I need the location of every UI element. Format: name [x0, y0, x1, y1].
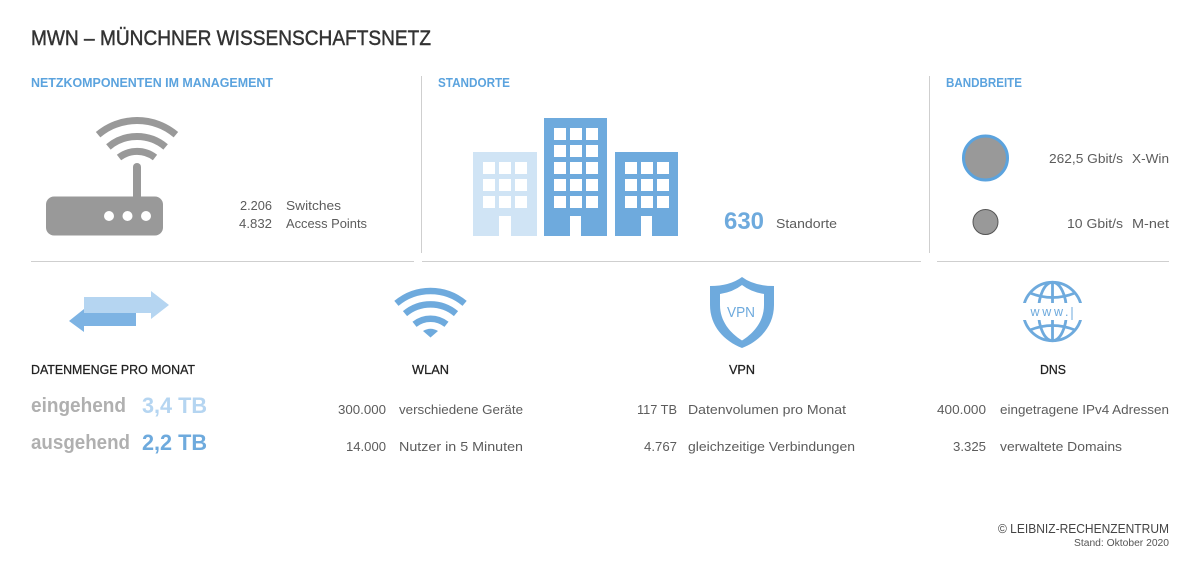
value: 3,4 TB: 3,4 TB — [142, 393, 207, 418]
heading: Netzkomponenten: NETZKOMPONENTEN IM MANAGEMENT — [31, 76, 273, 90]
stat: X-Win: X-Win — [1132, 151, 1169, 166]
footer: credit — [998, 521, 1169, 549]
circle: X-Win — [964, 136, 1008, 180]
stat: Geräte: verschiedene Geräte — [399, 402, 523, 417]
stat: Verbindungen: 4.767 — [644, 439, 677, 454]
stat: Nutzer — [346, 439, 523, 454]
stats: Access Points: 4.832 — [239, 216, 272, 231]
label: ausgehend: ausgehend — [31, 432, 130, 454]
icon: buildings — [473, 118, 678, 236]
stat: Nutzer: Nutzer in 5 Minuten — [399, 439, 523, 454]
panel: Datenmenge — [31, 291, 207, 455]
stat: IPv4: 400.000 — [937, 402, 986, 417]
icon: router — [46, 121, 176, 236]
stats: Access Points: Access Points — [286, 216, 367, 231]
stat: Verbindungen: gleichzeitige Verbindungen — [688, 439, 855, 454]
footer: credit: © LEIBNIZ-RECHENZENTRUM — [998, 521, 1169, 536]
stat: IPv4: eingetragene IPv4 Adressen — [1000, 402, 1169, 417]
icon: arrows — [69, 291, 169, 332]
heading: VPN: VPN — [729, 363, 755, 377]
heading: Standorte: STANDORTE — [438, 76, 510, 90]
stats: Switches — [240, 198, 342, 213]
stat: Datenvolumen — [637, 402, 846, 417]
stat: Nutzer: 14.000 — [346, 439, 386, 454]
stat: Domains — [953, 439, 1123, 454]
stat: M-net: 10 Gbit/s — [1067, 216, 1124, 231]
value: 2,2 TB: 2,2 TB — [142, 430, 207, 455]
icon: globe — [1020, 282, 1086, 341]
stat: Geräte: 300.000 — [338, 402, 386, 417]
panel: WLAN — [338, 291, 523, 454]
icon: shield: VPN — [727, 305, 755, 321]
stats: Switches: Switches — [286, 198, 342, 213]
stats: Access Points — [239, 216, 367, 231]
label: eingehend: eingehend — [31, 395, 126, 417]
heading: WLAN: WLAN — [412, 363, 449, 377]
heading: DNS: DNS — [1040, 363, 1066, 377]
icon: shield — [710, 277, 774, 348]
stat: Datenvolumen: Datenvolumen pro Monat — [688, 402, 846, 417]
stats: Switches: 2.206 — [240, 198, 272, 213]
stat: 630: 630 — [724, 208, 764, 235]
stat: M-net — [1067, 216, 1169, 231]
heading: Datenmenge pro Monat: DATENMENGE PRO MONAT — [31, 363, 195, 377]
panel: Bandbreite — [946, 76, 1169, 234]
icon: wifi — [396, 291, 465, 338]
panel: Standorte — [438, 76, 837, 236]
title: MWN – MÜNCHNER WISSENSCHAFTSNETZ — [31, 27, 431, 50]
stat: M-net: M-net — [1132, 216, 1169, 231]
heading: Bandbreite: BANDBREITE — [946, 76, 1022, 90]
stat: Geräte — [338, 402, 523, 417]
stat: Domains: verwaltete Domains — [1000, 439, 1123, 454]
label: Standorte: Standorte — [776, 216, 837, 231]
panel: Netzkomponenten — [31, 76, 367, 236]
panel: VPN — [637, 277, 855, 454]
stat: Datenvolumen: 117 TB — [637, 402, 677, 417]
panel: DNS — [937, 282, 1169, 454]
stat: X-Win — [1049, 151, 1169, 166]
icon: globe: www. — [1030, 305, 1068, 319]
footer: credit: Stand: Oktober 2020 — [1074, 538, 1169, 549]
stat: X-Win: 262,5 Gbit/s — [1049, 151, 1124, 166]
stat: Domains: 3.325 — [953, 439, 986, 454]
circle: M-net — [973, 210, 998, 234]
